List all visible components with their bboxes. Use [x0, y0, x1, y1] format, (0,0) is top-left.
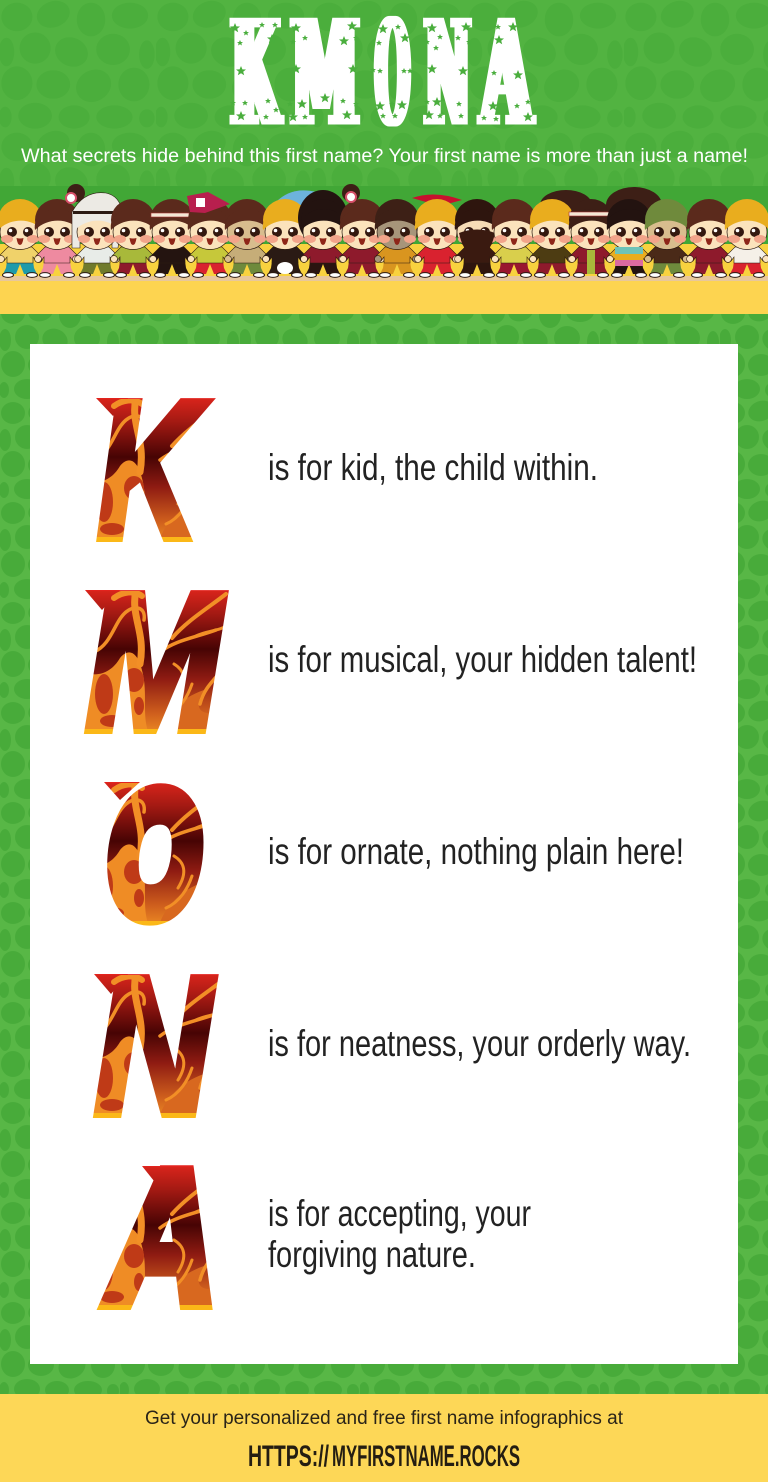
title stars — [230, 21, 533, 122]
kid 18 green hat — [645, 199, 689, 277]
letter K: K — [98, 360, 207, 580]
kid 15 blond olive — [530, 190, 592, 277]
kid 7 tan grass skirt — [225, 199, 269, 277]
footer url — [248, 1440, 520, 1473]
header background — [0, 0, 768, 190]
footer text: Get your personalized and free first name infographics at — [145, 1408, 624, 1429]
kid 19 maroon top — [687, 199, 731, 277]
subtitle: What secrets hide behind this first name? Your first name is more than just a name! — [21, 146, 748, 167]
letter N: N — [94, 936, 214, 1156]
kid 12 red dress — [412, 194, 462, 277]
letter O — [104, 760, 198, 950]
letter O: O — [109, 760, 198, 950]
kid 17 rainbow sweater — [606, 187, 662, 277]
character banner — [0, 184, 768, 314]
kid 9 black hair — [298, 190, 348, 277]
kid 2 pink kimono — [35, 184, 85, 277]
footer url: HTTPS:// — [248, 1440, 329, 1473]
letter A: A — [106, 1132, 217, 1344]
text: K: is for kid, the child within. — [268, 447, 598, 488]
kid 3 white headdress — [72, 193, 122, 277]
kid 8 blond blue hat — [263, 190, 316, 277]
text: A — [268, 1193, 531, 1275]
main white panel — [30, 344, 738, 1364]
letter M: M — [86, 552, 225, 772]
kid 11 tiger outfit — [375, 199, 419, 277]
kid 5 black dress — [150, 199, 194, 277]
kid 16 maroon robe — [569, 199, 613, 277]
text: A: is for accepting, your — [268, 1193, 531, 1234]
text: A: forgiving nature. — [268, 1234, 476, 1275]
kid 14 dotted skirt — [492, 199, 536, 277]
kid 4 brown and olive — [111, 199, 155, 277]
footer band — [0, 1394, 768, 1482]
footer url: MYFIRSTNAME.ROCKS — [332, 1440, 520, 1473]
title — [232, 0, 532, 159]
kid 1 blond overalls — [0, 199, 42, 277]
kid 10 flower hair — [340, 184, 384, 277]
kid 20 blond red pants — [725, 199, 768, 277]
kid 6 pink hat red skirt — [187, 192, 232, 277]
kid 13 beard — [455, 199, 499, 277]
